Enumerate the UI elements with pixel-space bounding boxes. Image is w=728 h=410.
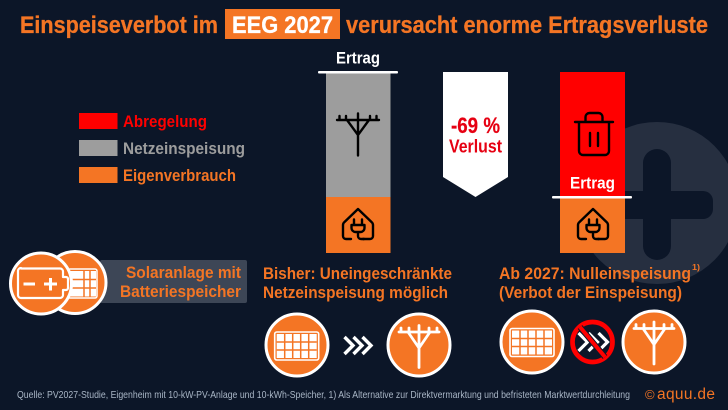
bar: bisher (318, 50, 398, 253)
heading: bisher: Netzeinspeisung möglich (263, 284, 448, 302)
heading: bisher (263, 265, 452, 302)
title (20, 9, 708, 39)
icon: prohibited chevrons (572, 322, 612, 362)
icon: house with plug (343, 209, 373, 239)
logo: aquu.de (657, 386, 715, 403)
background plus icon (576, 122, 728, 284)
bar: ab 2027 (552, 72, 632, 253)
heading: ab 2027: Ab 2027: Nulleinspeisung (499, 265, 691, 283)
icon: power pole (337, 114, 379, 156)
arrow: triple chevron (344, 337, 371, 354)
legend: Eigenverbrauch (123, 166, 236, 185)
heading: ab 2027: (Verbot der Einspeisung) (499, 284, 682, 302)
arrow: loss callout: -69 % (451, 113, 500, 138)
panel: solar system with battery (10, 252, 247, 314)
icon: house with plug (578, 209, 608, 239)
legend: Abregelung (123, 112, 207, 131)
title: EEG 2027 (232, 12, 333, 39)
arrow: loss callout (443, 72, 508, 197)
heading: ab 2027 (499, 263, 700, 302)
icon: battery circle (10, 253, 72, 314)
icon: trash can (575, 113, 613, 155)
icon: power pole, ab 2027 (623, 311, 685, 373)
bar: ab 2027: Ertrag (570, 174, 615, 192)
heading: bisher: Bisher: Uneingeschränkte (263, 265, 452, 283)
logo: © (645, 387, 655, 402)
icon: solar panel, bisher (266, 314, 328, 376)
legend (79, 112, 245, 185)
icon: solar panel circle (44, 252, 106, 314)
panel: solar system with battery: Solaranlage mit (126, 263, 241, 282)
legend: Netzeinspeisung (123, 139, 245, 158)
icon: power pole, bisher (388, 314, 450, 376)
icon: solar panel, ab 2027 (501, 311, 563, 373)
panel: solar system with battery: Batteriespeicher (120, 282, 241, 301)
heading: ab 2027: 1) (692, 263, 700, 272)
arrow: loss callout: Verlust (449, 137, 502, 157)
bar: bisher: Ertrag (336, 50, 380, 68)
title: Einspeiseverbot im (20, 12, 218, 39)
